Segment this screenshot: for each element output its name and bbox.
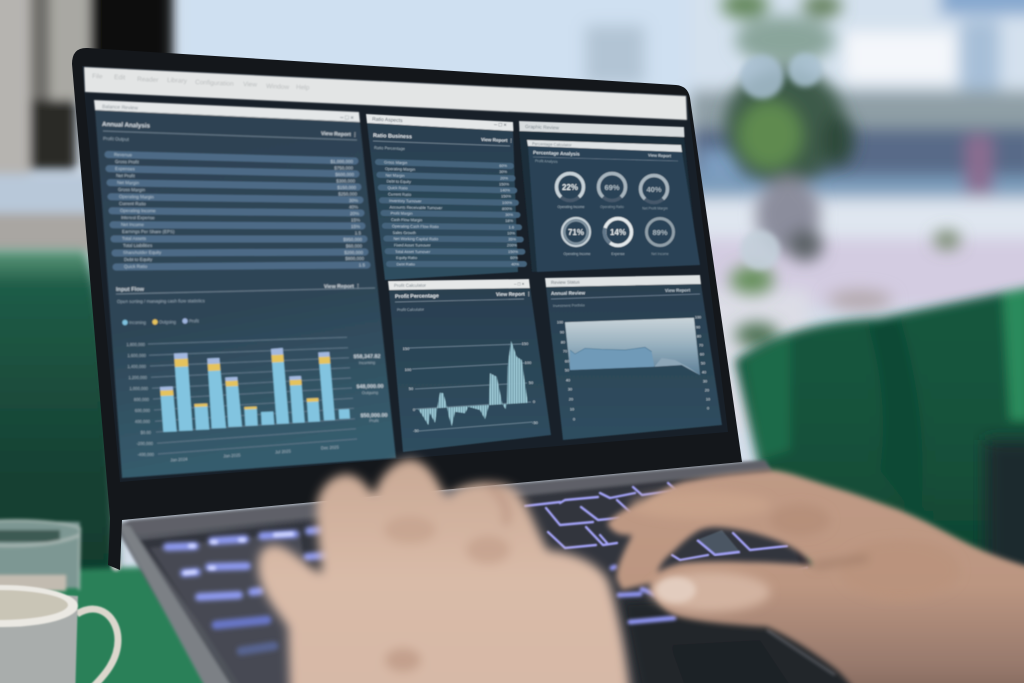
heading — [551, 288, 700, 308]
right hand — [607, 470, 1024, 683]
donut: 40%: Net Profit Margin — [642, 206, 668, 210]
panel: profit calculator: 150 — [403, 346, 410, 351]
area chart scales: 50 — [565, 368, 569, 372]
coffee cup — [0, 585, 118, 683]
percentage panel: Profit Analysis — [535, 159, 558, 164]
panel: annual review: Operating Margin — [119, 194, 154, 199]
glass — [0, 520, 80, 591]
bar chart axis labels: 1,600,000 — [127, 353, 147, 358]
panel: ratio aspects: 150% — [501, 194, 512, 198]
donut: 69%: Operating Ratio — [600, 205, 624, 209]
heading: Profit Output — [103, 136, 130, 142]
menu bar: File — [92, 73, 103, 81]
highlights on left keys — [185, 534, 292, 573]
percentage panel: Percentage Calculator — [532, 141, 572, 147]
keyboard backlight, left keys — [167, 530, 328, 651]
window title bar: – □ × — [514, 281, 525, 286]
panel: ratio aspects: Total Asset Turnover — [395, 249, 431, 254]
panel: ratio aspects: Net Margin — [385, 173, 405, 178]
area chart scales: 90 — [696, 326, 700, 330]
heading — [395, 291, 531, 312]
donut: 89%: Net Income — [651, 252, 669, 256]
panel: ratio aspects: 10% — [507, 230, 516, 236]
heading: View Report ⋮ — [496, 291, 531, 298]
chart summary figures — [353, 354, 388, 423]
menu bar: Help — [296, 84, 310, 92]
donut: 89% — [646, 218, 674, 256]
panel: profit calculator: -50 — [532, 420, 539, 425]
window title bar — [94, 100, 360, 122]
panel: profit calculator: 50 — [529, 380, 534, 385]
panel: ratio aspects: Profit Margin — [390, 211, 413, 216]
panel: annual review: $950,000 — [343, 237, 362, 242]
touchpad area — [620, 590, 870, 683]
panel: ratio aspects: 30% — [505, 212, 514, 217]
window title bar: Balance Review — [102, 104, 138, 112]
panel: profit calculator: 0 — [413, 407, 416, 412]
panel: annual review: Current Ratio — [119, 201, 146, 206]
panel: ratio aspects: 35% — [508, 236, 517, 242]
panel: annual review: Quick Ratio — [124, 264, 148, 269]
panel: ratio aspects: Current Ratio — [388, 192, 411, 197]
chart summary figures: $50,000.00 — [360, 413, 388, 419]
foot of laptop — [111, 559, 121, 571]
menu bar: View — [243, 81, 257, 89]
heading: View Report ⋮ — [481, 136, 513, 144]
panel: ratio aspects: Quick Ratio — [387, 185, 408, 190]
bar chart — [160, 348, 350, 432]
bar chart grid — [148, 337, 357, 454]
panel: ratio aspects: 60% — [499, 163, 508, 168]
heading: Profit Percentage — [395, 293, 439, 300]
panel: annual review: Shareholder Equity — [123, 250, 162, 255]
bar chart axis labels — [126, 342, 155, 457]
window title bar — [366, 114, 514, 131]
panel: ratio aspects: Operating Margin — [385, 166, 415, 172]
dark shadow behind right hand — [985, 440, 1024, 590]
donut: 14% — [604, 218, 632, 256]
area chart scales: 40 — [566, 378, 570, 382]
area chart scales — [557, 316, 710, 422]
panel: ratio aspects: 100% — [502, 200, 513, 205]
panel: annual review: $600,000 — [335, 172, 354, 177]
panel: ratio aspects: 140% — [500, 188, 511, 192]
bar chart axis labels: 400,000 — [135, 419, 151, 424]
panel: annual review: Total Liabilities — [123, 243, 153, 248]
chart legend — [122, 318, 200, 325]
ratio rows — [378, 162, 524, 264]
window title bar — [545, 275, 701, 287]
panel: ratio aspects: 1.6 — [509, 224, 514, 230]
chart summary figures: $58,347.82 — [353, 354, 381, 360]
bar chart axis labels: 1,800,000 — [126, 342, 146, 347]
chart summary figures: Profit — [369, 418, 380, 423]
panel: ratio aspects: Gross Margin — [384, 160, 407, 165]
panel: annual review: 1.5 — [355, 230, 361, 236]
area chart scales: 80 — [561, 340, 565, 344]
panel: annual review: Dec 2025 — [321, 444, 340, 451]
panel: ratio aspects: Equity Ratio — [396, 255, 417, 260]
panel: annual review: $800,000 — [345, 256, 364, 261]
panel: annual review: $1,000,000 — [330, 159, 353, 164]
raised key — [697, 530, 740, 555]
area chart scales: 0 — [573, 418, 575, 422]
donut: 71%: 71% — [568, 228, 584, 237]
panel: profit calculator — [388, 279, 551, 452]
panel: ratio aspects: Operating Cash Flow Ratio — [392, 224, 439, 229]
glowing keys near thumb — [612, 567, 674, 622]
percentage panel: View Report — [648, 153, 672, 158]
bar chart axis labels: -200,000 — [136, 441, 154, 446]
panel: annual review: Net Income — [121, 222, 145, 227]
window title bar: Ratio Aspects — [372, 117, 403, 124]
profit area chart — [418, 341, 528, 426]
donut: 22% — [556, 173, 585, 209]
chart summary figures: Incoming — [359, 360, 375, 365]
menu bar: Window — [266, 83, 290, 91]
panel: annual review: $60,000 — [346, 244, 362, 248]
panel: annual review: Interest Expense — [121, 215, 155, 220]
panel: annual review: Total Assets — [122, 236, 147, 241]
donut: 22%: Operating Income — [558, 205, 585, 209]
chart summary figures: $48,000.00 — [356, 384, 384, 390]
window title bar: Review Status — [551, 279, 581, 285]
window title bar — [519, 121, 684, 137]
panel: annual review: Gross Profit — [115, 159, 140, 165]
panel: annual review: Earnings Per Share (EPS) — [122, 229, 175, 234]
area chart scales: 60 — [700, 352, 704, 356]
panel: annual review: Revenue — [114, 152, 133, 157]
menu bar: Edit — [114, 74, 126, 82]
panel: annual review: 40% — [349, 204, 358, 210]
chart legend: Outgoing — [159, 320, 177, 324]
donut: 14%: Expense — [611, 252, 625, 256]
panel: annual review: Jan 2025 — [223, 452, 241, 459]
bar chart axis labels: -400,000 — [137, 452, 155, 457]
donut: 89%: 89% — [652, 228, 668, 237]
area chart scales: 10 — [570, 408, 574, 412]
panel: ratio aspects: Fixed Asset Turnover — [394, 243, 431, 248]
panel: annual review: Expenses — [115, 166, 136, 171]
panel: graphic review — [519, 121, 700, 272]
panel: profit calculator: 0 — [533, 399, 536, 404]
panel: ratio aspects: 20% — [500, 176, 509, 180]
area chart scales: 30 — [703, 380, 707, 384]
area chart — [565, 318, 700, 375]
left hand — [258, 459, 631, 683]
panel: ratio aspects: Accounts Receivable Turnover — [389, 205, 443, 210]
panel: annual review: $300,000 — [336, 178, 355, 184]
area chart scales: 10 — [706, 398, 710, 402]
panel: ratio aspects — [366, 114, 524, 280]
heading: Annual Analysis — [102, 121, 151, 130]
donut: 14%: 14% — [610, 228, 626, 237]
panel: ratio aspects: 150% — [499, 182, 510, 186]
area chart scales: 80 — [697, 334, 701, 338]
menu bar: Configuration — [195, 79, 234, 88]
panel: annual review: Net Margin — [117, 180, 140, 185]
bar chart axis labels: 1,400,000 — [127, 364, 147, 369]
bar chart axis labels: $0.00 — [141, 430, 152, 435]
panel: review status — [545, 275, 722, 440]
area chart scales: 70 — [563, 350, 567, 354]
bar chart axis labels: 1,200,000 — [128, 375, 148, 380]
panel: ratio aspects: Sales Growth — [392, 230, 416, 235]
section heading: input flow: Input Flow — [116, 287, 145, 293]
area chart scales: 40 — [702, 370, 706, 374]
window title bar: – □ × — [340, 115, 354, 122]
panel: ratio aspects: Cash Flow Margin — [391, 217, 422, 222]
heading: Investment Portfolio — [553, 303, 585, 308]
panel: ratio aspects: 150% — [508, 249, 519, 254]
panel: ratio aspects: 60% — [510, 255, 519, 260]
donut: 69%: 69% — [604, 183, 620, 192]
donut: 22%: 22% — [562, 183, 578, 192]
panel: profit calculator: 150 — [522, 341, 529, 346]
panel: profit calculator: 100 — [405, 367, 412, 372]
area chart scales: 20 — [705, 388, 709, 392]
panel: ratio aspects: 800% — [502, 206, 513, 211]
panel: annual review: $200,000 — [344, 250, 363, 255]
laptop lid — [72, 48, 742, 570]
green sofa right — [735, 285, 1024, 683]
heading: Annual Review — [551, 290, 585, 297]
area chart scales: 30 — [568, 388, 572, 392]
panel: annual review: Net Profit — [116, 173, 136, 178]
heading: Ratio Business — [373, 133, 412, 140]
panel: profit calculator: -50 — [413, 428, 420, 433]
chart legend: Profit — [189, 318, 200, 324]
window title bar: Profit Calculator — [394, 283, 427, 288]
donut: 71%: Operating Income — [564, 252, 591, 256]
area chart scales: 90 — [560, 330, 564, 334]
panel: ratio aspects: Debt to Equity — [386, 179, 411, 184]
green sofa left — [0, 250, 118, 600]
window title bar — [388, 279, 530, 290]
heading: Profit Calculator — [397, 308, 425, 312]
donut: 71% — [562, 218, 591, 256]
heading — [373, 133, 513, 151]
panel: ratio aspects: Net Working Capital Ratio — [393, 236, 438, 241]
section heading: input flow: Open sorting / managing cash flow statistics — [117, 298, 206, 304]
laptop keyboard deck — [114, 460, 870, 683]
panel: annual review: Jan 2024 — [170, 456, 188, 463]
chart summary figures: Outgoing — [362, 390, 378, 395]
section heading: input flow: View Report ⋮ — [324, 283, 361, 290]
window title bar: – □ × — [494, 122, 507, 129]
heading: Ratio Percentage — [374, 145, 406, 151]
chart legend: Incoming — [129, 320, 147, 325]
screen — [82, 66, 728, 482]
area chart scales: 20 — [569, 398, 573, 402]
panel: annual review: 15% — [351, 224, 360, 229]
bar chart axis labels: 800,000 — [134, 397, 150, 402]
area chart scales: 60 — [565, 360, 569, 364]
green table — [50, 566, 280, 683]
table rows — [108, 154, 367, 267]
panel: annual review: 20% — [350, 211, 359, 216]
percentage panel — [527, 140, 700, 272]
panel: ratio aspects: 40% — [511, 262, 520, 266]
panel: annual review: Gross Margin — [118, 187, 146, 192]
thumb tip — [656, 577, 696, 603]
panel: annual review: Jul 2025 — [275, 448, 292, 454]
area chart scales: 100 — [695, 316, 701, 320]
area chart scales: 70 — [699, 344, 703, 348]
area chart scales: 50 — [701, 362, 705, 366]
area chart scales: 0 — [707, 406, 709, 410]
heading — [102, 121, 358, 142]
heading: View Report ⋮ — [321, 130, 358, 138]
donut: 40%: 40% — [646, 185, 662, 194]
panel: annual review: Operating Income — [120, 208, 156, 213]
touchpad edge — [767, 630, 835, 675]
panel: annual review: $150,000 — [337, 185, 356, 190]
panel: annual review: $250,000 — [338, 192, 357, 196]
window title bar: Graphic Review — [525, 124, 560, 131]
menu bar — [84, 67, 687, 120]
keyboard backlight, right keys — [525, 483, 807, 572]
panel: annual review: 1.5 — [359, 262, 365, 268]
panel: annual review: $750,000 — [334, 166, 353, 170]
panel: ratio aspects: 18% — [505, 218, 514, 223]
profit chart grid — [409, 344, 533, 431]
panel: annual review: 15% — [351, 218, 360, 222]
percentage panel: Percentage Analysis — [533, 150, 580, 158]
donut: 69% — [598, 173, 626, 209]
donut: 40% — [640, 175, 668, 210]
menu bar: Library — [167, 77, 188, 85]
panel: ratio aspects: 200% — [507, 242, 518, 248]
panel: profit calculator: 100 — [525, 360, 532, 365]
panel: annual review: 30% — [349, 198, 358, 203]
heading: View Report — [665, 288, 691, 293]
panel: profit calculator: 50 — [409, 386, 414, 391]
panel: ratio aspects: Debt Ratio — [396, 262, 415, 266]
section heading: input flow — [116, 283, 375, 304]
panel: ratio aspects: Inventory Turnover — [389, 198, 422, 204]
panel: ratio aspects: 30% — [499, 169, 508, 174]
area chart scales: 100 — [557, 320, 563, 324]
bar chart axis labels: 1,000,000 — [129, 386, 149, 391]
bar chart axis labels: 600,000 — [135, 408, 151, 413]
panel: annual review — [94, 100, 396, 478]
menu bar: Reader — [137, 76, 159, 84]
panel: annual review: Debt to Equity — [124, 257, 153, 262]
